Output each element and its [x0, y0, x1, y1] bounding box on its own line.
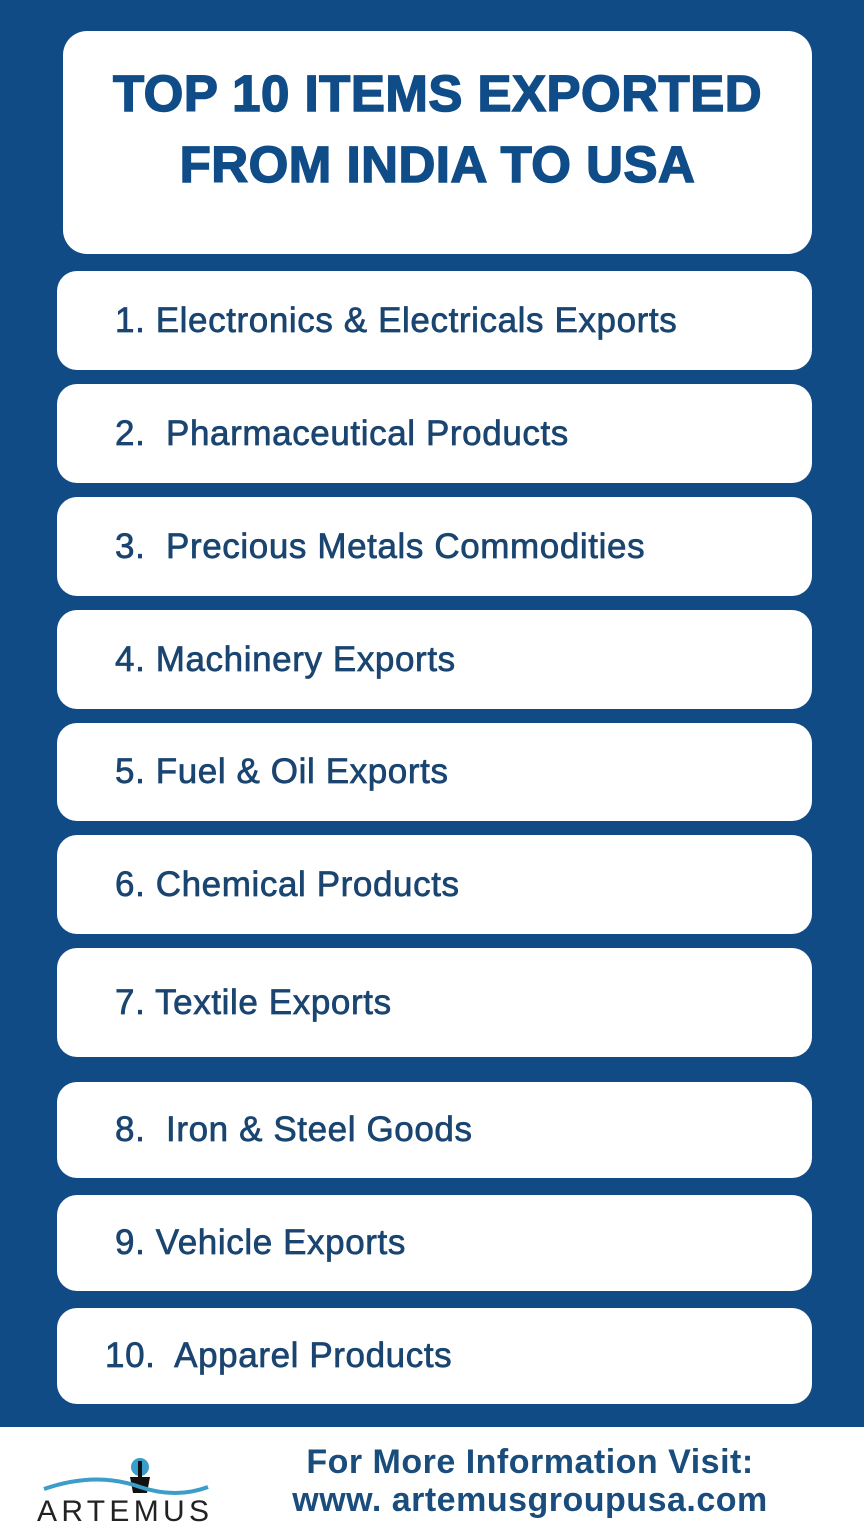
item 7	[57, 948, 812, 1057]
item 8	[57, 1082, 812, 1178]
footer text: www. artemusgroupusa.com	[292, 1481, 768, 1519]
item 5: 5. Fuel & Oil Exports	[115, 752, 449, 791]
item 1: 1. Electronics & Electricals Exports	[115, 300, 677, 340]
item 3	[57, 497, 812, 596]
item 3: 3. Precious Metals Commodities	[115, 526, 645, 566]
logo: Artemus	[37, 1458, 209, 1528]
item 9: 9. Vehicle Exports	[115, 1223, 406, 1262]
item 9	[57, 1195, 812, 1291]
logo: Artemus: ARTEMUS	[37, 1495, 209, 1528]
title	[63, 31, 812, 254]
item 8: 8. Iron & Steel Goods	[115, 1110, 473, 1149]
item 4	[57, 610, 812, 709]
item 2: 2. Pharmaceutical Products	[115, 414, 569, 452]
item 6: 6. Chemical Products	[115, 864, 460, 904]
item 4: 4. Machinery Exports	[115, 640, 456, 678]
footer text: For More Information Visit:	[306, 1443, 754, 1481]
item 5	[57, 723, 812, 821]
title: FROM INDIA TO USA	[180, 136, 695, 193]
title: TOP 10 ITEMS EXPORTED	[113, 65, 762, 122]
item 2	[57, 384, 812, 483]
item 1	[57, 271, 812, 370]
item 10: 10. Apparel Products	[105, 1336, 452, 1375]
footer	[0, 1427, 864, 1536]
item 10	[57, 1308, 812, 1404]
item 7: 7. Textile Exports	[115, 982, 392, 1022]
item 6	[57, 835, 812, 934]
footer text	[292, 1443, 768, 1519]
